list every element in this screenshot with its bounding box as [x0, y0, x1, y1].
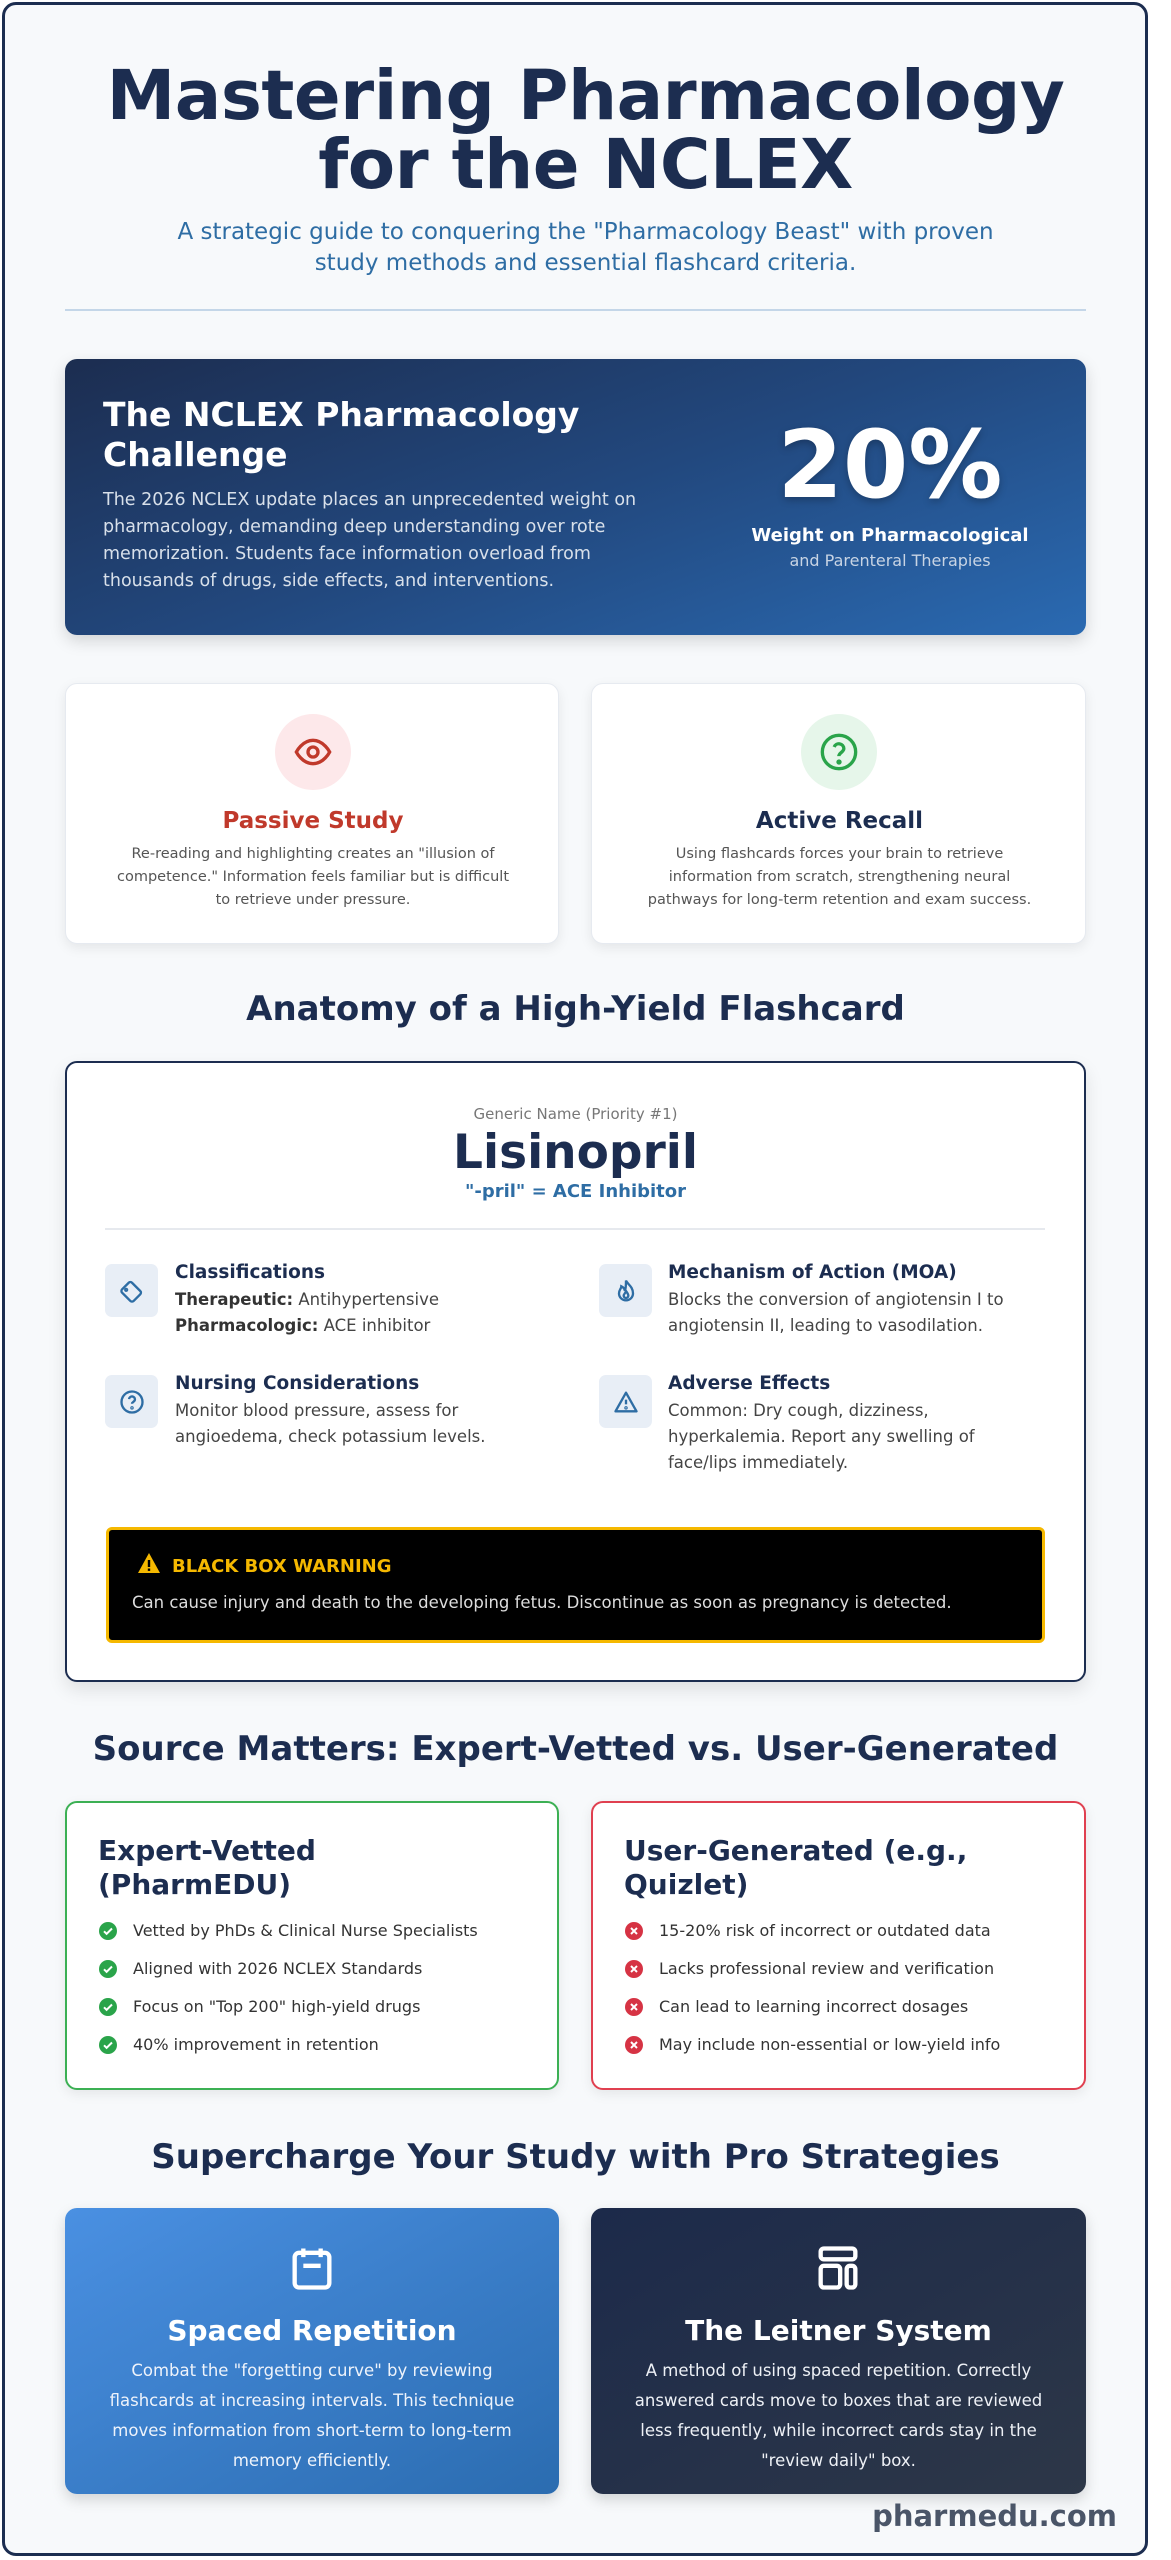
- heading: [103, 395, 579, 474]
- text: Re-reading and highlighting creates an "illusion of: [132, 846, 494, 862]
- text block: [102, 490, 636, 591]
- drug name: Lisinopril: [453, 1125, 698, 1180]
- panel: user generated: Quizlet): [624, 1868, 748, 1901]
- icon: warning filled: [138, 1553, 160, 1573]
- item: adverse: face/lips immediately.: [668, 1453, 848, 1472]
- panel: expert vetted: Expert-Vetted: [98, 1834, 316, 1867]
- item: nursing: Monitor blood pressure, assess for: [175, 1401, 458, 1420]
- text: [117, 846, 509, 908]
- panel: spaced repetition: moves information from short-term to long-term: [112, 2421, 512, 2440]
- text block: memorization. Students face information overload from: [103, 544, 591, 564]
- generic label: Generic Name (Priority #1): [474, 1105, 677, 1123]
- panel: leitner system: The Leitner System: [685, 2314, 992, 2347]
- subtitle: [177, 219, 994, 276]
- text block: thousands of drugs, side effects, and interventions.: [103, 571, 554, 591]
- panel: leitner system: A method of using spaced repetition. Correctly: [646, 2361, 1031, 2380]
- panel: expert vetted: Focus on "Top 200" high-yield drugs: [133, 1997, 420, 2016]
- panel: spaced repetition: memory efficiently.: [233, 2451, 391, 2470]
- icon: layout: [818, 2246, 858, 2290]
- text: Using flashcards forces your brain to retrieve: [676, 846, 1003, 862]
- heading: supercharge: Supercharge Your Study with Pro Strategies: [151, 2137, 1000, 2177]
- icon: flame: [599, 1264, 652, 1317]
- item: nursing: angioedema, check potassium levels.: [175, 1427, 486, 1446]
- item: nursing: Nursing Considerations: [175, 1373, 419, 1394]
- panel: active recall: [591, 683, 1086, 944]
- title: Mastering Pharmacology: [107, 56, 1064, 136]
- title: for the NCLEX: [318, 125, 853, 205]
- item: adverse: [668, 1373, 975, 1472]
- heading: Passive Study: [222, 808, 404, 834]
- panel: leitner system: "review daily" box.: [761, 2451, 916, 2470]
- callout: black box warning: BLACK BOX WARNING: [172, 1556, 392, 1577]
- text: information from scratch, strengthening neural: [669, 869, 1010, 885]
- item: moa: Mechanism of Action (MOA): [668, 1262, 957, 1283]
- text: to retrieve under pressure.: [216, 892, 410, 908]
- icon: warning: [599, 1375, 652, 1428]
- panel: user generated: User-Generated (e.g.,: [624, 1834, 967, 1867]
- icon: eye: [275, 714, 351, 790]
- panel: spaced repetition: Spaced Repetition: [167, 2314, 457, 2347]
- title: [107, 56, 1064, 205]
- panel: expert vetted: Vetted by PhDs & Clinical Nurse Specialists: [133, 1921, 478, 1940]
- item: adverse: hyperkalemia. Report any swelling of: [668, 1427, 975, 1446]
- suffix: "-pril" = ACE Inhibitor: [465, 1181, 686, 1202]
- panel: expert vetted: [65, 1801, 559, 2090]
- item: moa: [668, 1262, 1004, 1335]
- list: [99, 1921, 478, 2054]
- icon: question: [801, 714, 877, 790]
- panel: expert vetted: (PharmEDU): [98, 1868, 291, 1901]
- icon: calendar: [292, 2248, 332, 2290]
- heading: source matters: Source Matters: Expert-Vetted vs. User-Generated: [93, 1729, 1058, 1769]
- panel: spaced repetition: Combat the "forgetting curve" by reviewing: [131, 2361, 493, 2380]
- heading: Challenge: [103, 435, 287, 474]
- item: classifications: Therapeutic: Antihypertensive: [175, 1290, 439, 1309]
- text block: The 2026 NCLEX update places an unprecedented weight on: [103, 490, 636, 510]
- item: adverse: Adverse Effects: [668, 1373, 830, 1394]
- panel: spaced repetition: flashcards at increasing intervals. This technique: [110, 2391, 514, 2410]
- text block: pharmacology, demanding deep understanding over rote: [103, 517, 605, 537]
- panel: user generated: Lacks professional review and verification: [659, 1959, 994, 1978]
- panel: leitner system: answered cards move to boxes that are reviewed: [635, 2391, 1042, 2410]
- panel: user generated: May include non-essential or low-yield info: [659, 2035, 1000, 2054]
- text: pathways for long-term retention and exam success.: [648, 892, 1031, 908]
- stat: and Parenteral Therapies: [789, 551, 991, 570]
- stat: [751, 411, 1029, 570]
- item: moa: angiotensin II, leading to vasodilation.: [668, 1316, 983, 1335]
- callout: black box warning: Can cause injury and death to the developing fetus. Discontinue as soon as pregnancy is detected.: [132, 1593, 952, 1612]
- stat: Weight on Pharmacological: [751, 525, 1029, 546]
- text: [648, 846, 1031, 908]
- subtitle: A strategic guide to conquering the "Pharmacology Beast" with proven: [177, 219, 994, 245]
- item: classifications: [175, 1262, 439, 1335]
- text: competence." Information feels familiar but is difficult: [117, 869, 509, 885]
- panel: passive study: [65, 683, 559, 944]
- callout: black box warning: [106, 1527, 1045, 1643]
- icon: help: [105, 1375, 158, 1428]
- panel: leitner system: [591, 2208, 1086, 2494]
- heading: The NCLEX Pharmacology: [103, 395, 579, 434]
- list: [625, 1921, 1000, 2054]
- panel: spaced repetition: [65, 2208, 559, 2494]
- heading: anatomy: Anatomy of a High-Yield Flashcard: [246, 989, 905, 1029]
- item: classifications: Classifications: [175, 1262, 325, 1283]
- subtitle: study methods and essential flashcard criteria.: [315, 250, 856, 276]
- panel: expert vetted: Aligned with 2026 NCLEX Standards: [133, 1959, 422, 1978]
- item: nursing: [175, 1373, 486, 1446]
- stat: 20%: [778, 411, 1002, 520]
- item: moa: Blocks the conversion of angiotensin I to: [668, 1290, 1004, 1309]
- icon: tag: [105, 1264, 158, 1317]
- footer brand: pharmedu.com: [872, 2499, 1117, 2533]
- panel: user generated: [591, 1801, 1086, 2090]
- panel: user generated: 15-20% risk of incorrect or outdated data: [659, 1921, 991, 1940]
- item: classifications: Pharmacologic: ACE inhibitor: [175, 1316, 430, 1335]
- panel: flashcard: [65, 1061, 1086, 1682]
- panel: expert vetted: 40% improvement in retention: [133, 2035, 379, 2054]
- panel: leitner system: less frequently, while incorrect cards stay in the: [640, 2421, 1037, 2440]
- item: adverse: Common: Dry cough, dizziness,: [668, 1401, 929, 1420]
- panel: challenge: [65, 359, 1086, 635]
- panel: user generated: Can lead to learning incorrect dosages: [659, 1997, 968, 2016]
- heading: Active Recall: [756, 808, 923, 834]
